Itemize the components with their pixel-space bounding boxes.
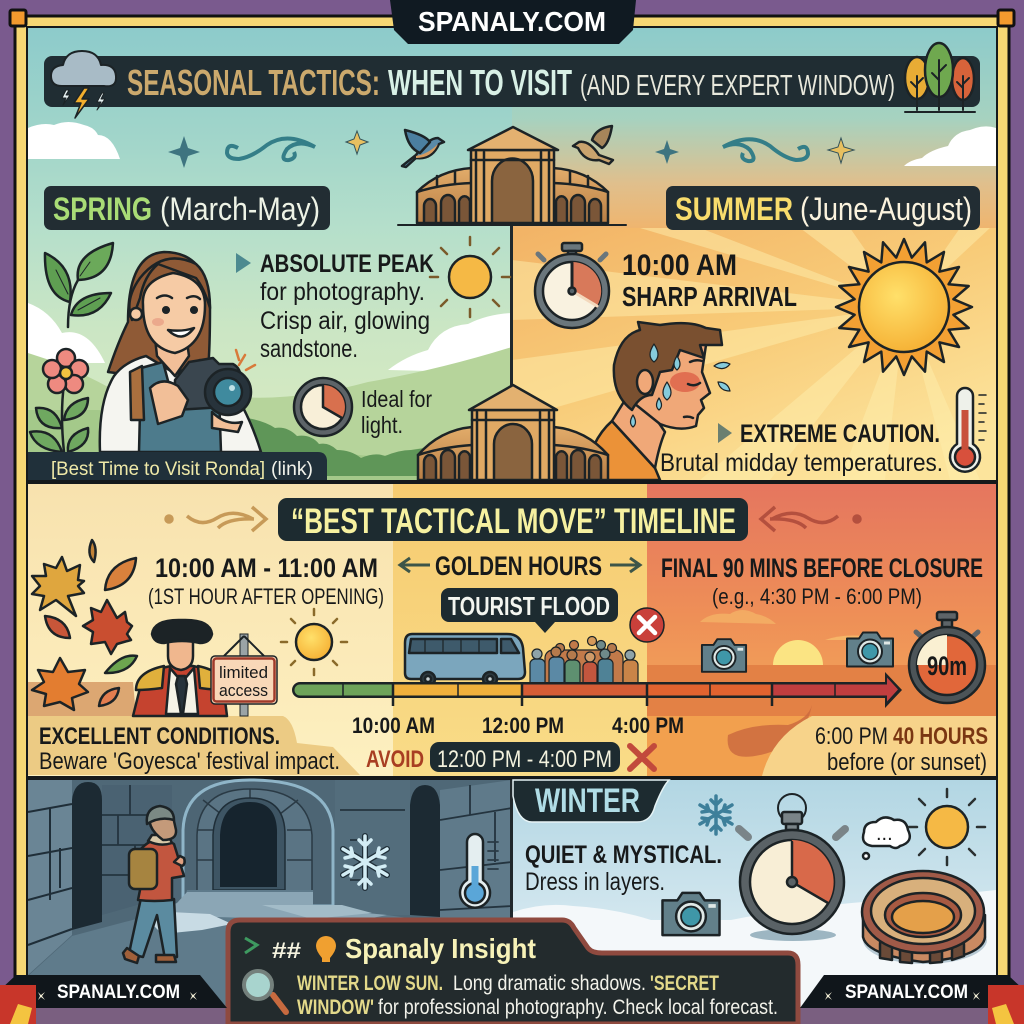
avoid window: 12:00 PM - 4:00 PM: [437, 746, 612, 773]
icon: winter sun: [909, 789, 985, 865]
icon: autumn trees: [905, 43, 975, 112]
avoid window: [366, 742, 654, 773]
spring text block: for photography.: [260, 278, 425, 306]
avoid window: AVOID: [366, 746, 424, 773]
sign: limited access: limited: [219, 663, 268, 682]
timeline title: “BEST TACTICAL MOVE” TIMELINE: [291, 502, 736, 541]
icon: summer stopwatch: [535, 243, 609, 328]
illustration: tourist crowd: [530, 636, 638, 692]
panel: summer: [510, 226, 996, 480]
icon: snowflake: [343, 836, 387, 888]
corner ornament left: [0, 985, 36, 1024]
illustration: matador: [133, 620, 227, 716]
timeline title: [278, 498, 748, 541]
sign: limited access: [211, 634, 277, 716]
morning time label: (1ST HOUR AFTER OPENING): [148, 584, 384, 609]
title text: SEASONAL TACTICS:: [127, 62, 380, 103]
top logo badge: [390, 0, 636, 44]
winter text: Dress in layers.: [525, 868, 665, 896]
panel: bottom frame strip: [28, 1008, 996, 1024]
icon: bus: [405, 634, 525, 686]
summer heading: SUMMER: [675, 191, 793, 227]
spring clock note: [361, 386, 432, 438]
summer arrival text: SHARP ARRIVAL: [622, 281, 797, 312]
morning time label: [148, 553, 384, 609]
bottom right logo badge: [800, 975, 1024, 1008]
morning time label: 10:00 AM - 11:00 AM: [155, 553, 378, 583]
closing time text: 40 HOURS: [893, 723, 988, 750]
title text: [127, 62, 895, 103]
corner ornament top right: [998, 10, 1014, 26]
icon: sunset: [700, 610, 895, 665]
summer caution text: Brutal midday temperatures.: [660, 449, 943, 477]
illustration: sweating man: [584, 322, 730, 480]
spring text block: sandstone.: [260, 335, 358, 363]
corner ornament top left: [10, 10, 26, 26]
final window label: (e.g., 4:30 PM - 6:00 PM): [712, 584, 922, 609]
spring heading: [44, 186, 330, 230]
insight text: WINTER LOW SUN.: [297, 972, 443, 995]
ornament: right arrow flourish: [761, 507, 860, 531]
insight text: Long dramatic shadows.: [453, 972, 646, 995]
icon: tan bird: [573, 126, 613, 164]
insight heading: [245, 933, 536, 964]
icon: camera 2: [847, 632, 893, 666]
link label: (link): [271, 459, 313, 480]
excellent conditions text: [39, 723, 340, 775]
timeline hour labels: [352, 713, 684, 738]
panel: winter scene: [28, 780, 512, 1016]
sign: limited access: access: [219, 681, 268, 700]
summer caution text: [660, 420, 943, 477]
icon: camera 1: [702, 639, 746, 672]
decorative stars and swirls left: [168, 131, 368, 168]
title text: (AND EVERY EXPERT WINDOW): [580, 70, 895, 102]
icon: spring clock: [294, 378, 352, 436]
colosseum: top: [398, 127, 626, 225]
icon: magnifying glass: [244, 971, 286, 1012]
icon: leaves: [45, 243, 113, 327]
illustration: photographer: [100, 252, 261, 452]
spring heading: SPRING: [53, 191, 152, 227]
insight text: WINDOW': [297, 996, 374, 1019]
golden hours label: GOLDEN HOURS: [435, 551, 602, 581]
panel: winter right: [510, 780, 996, 1016]
icon: 90 minute stopwatch: [909, 612, 985, 703]
title bar: [44, 56, 980, 107]
icon: winter stopwatch: [739, 794, 845, 941]
winter text: QUIET & MYSTICAL.: [525, 841, 722, 869]
icon: thought bubble: [863, 817, 910, 859]
summer arrival text: [622, 249, 797, 312]
timeline hour labels: 4:00 PM: [612, 713, 684, 738]
winter text: [525, 841, 722, 896]
spring clock note: light.: [361, 412, 403, 438]
insight heading: ##: [272, 938, 301, 963]
timeline hour labels: 10:00 AM: [352, 713, 435, 738]
summer heading: [666, 186, 980, 230]
panel: timeline: [26, 480, 998, 780]
spring text block: [236, 250, 434, 363]
icon: morning sun: [281, 609, 347, 675]
spring text block: ABSOLUTE PEAK: [260, 250, 434, 278]
insight text: [297, 972, 778, 1019]
summer heading: (June-August): [800, 191, 972, 227]
link label: [28, 452, 327, 480]
icon: falling leaves: [32, 540, 137, 710]
insight heading: Spanaly Insight: [345, 933, 536, 964]
excellent conditions text: Beware 'Goyesca' festival impact.: [39, 748, 340, 775]
tourist flood callout: TOURIST FLOOD: [448, 591, 610, 621]
closing time text: [815, 723, 988, 776]
spring text block: Crisp air, glowing: [260, 307, 430, 335]
icon: blue bird: [402, 130, 444, 167]
decorative stars and swirls right: [655, 138, 854, 164]
timeline bar: [292, 672, 902, 708]
icon: mini arena: [862, 871, 987, 964]
panel: spring: [28, 228, 512, 480]
icon: storm cloud: [51, 51, 116, 118]
insight text: 'SECRET: [650, 972, 719, 995]
spring heading: (March-May): [160, 191, 320, 227]
link label: [Best Time to Visit Ronda]: [51, 459, 265, 480]
icon: thermometer: [950, 388, 986, 472]
tourist flood callout: [441, 588, 618, 633]
panel: sky band: [28, 28, 996, 228]
icon: red cross: [630, 608, 664, 642]
illustration: hiker: [123, 806, 185, 963]
panel: spanaly insight: [228, 920, 798, 1024]
ornament: left arrow flourish: [166, 507, 266, 531]
bottom left logo badge: [0, 975, 227, 1008]
icon: 90 minute stopwatch: 90m: [927, 651, 967, 681]
icon: thought bubble: ...: [876, 823, 893, 845]
insight text: for professional photography. Check local forecast.: [378, 996, 778, 1019]
top logo badge: SPANALY.COM: [418, 6, 606, 37]
closing time text: before (or sunset): [827, 749, 987, 776]
icon: flower: [30, 349, 88, 452]
excellent conditions text: EXCELLENT CONDITIONS.: [39, 723, 280, 750]
summer arrival text: 10:00 AM: [622, 249, 737, 282]
icon: winter camera: [662, 893, 720, 935]
spring clock note: Ideal for: [361, 386, 432, 412]
bottom right logo badge: SPANALY.COM: [845, 982, 968, 1003]
icon: blazing sun: [836, 239, 972, 375]
corner ornament right: [988, 985, 1024, 1024]
timeline hour labels: 12:00 PM: [482, 713, 564, 738]
final window label: [661, 553, 983, 609]
winter heading: WINTER: [535, 782, 640, 820]
bottom left logo badge: SPANALY.COM: [57, 982, 180, 1003]
colosseum: bottom: [418, 385, 608, 480]
icon: blue snowflake: [700, 796, 732, 834]
icon: spring sun: [430, 237, 510, 317]
icon: winter thermometer: [460, 834, 498, 908]
title text: WHEN TO VISIT: [388, 62, 572, 103]
closing time text: 6:00 PM: [815, 723, 888, 750]
summer caution text: EXTREME CAUTION.: [740, 420, 940, 448]
